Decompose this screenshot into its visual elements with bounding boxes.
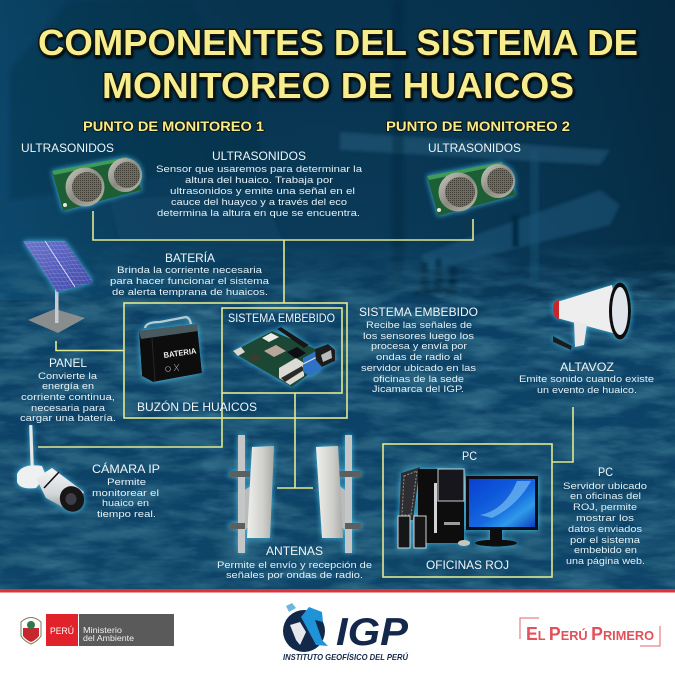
label: ultrasonidos 2: ULTRASONIDOS bbox=[428, 141, 521, 155]
icon: ultrasonic sensor 1 bbox=[52, 157, 142, 211]
text: PC description: ROJ, permite bbox=[573, 502, 637, 512]
text: antenas description bbox=[217, 544, 372, 580]
text: sistema embebido description: procesa y envía por bbox=[371, 341, 467, 351]
text: ultrasonidos description: cauce del huayco y a través del eco bbox=[171, 197, 347, 207]
text: cámara IP description: huaico en bbox=[102, 498, 149, 508]
icon: battery bbox=[139, 317, 202, 382]
connector lines bbox=[38, 211, 573, 488]
text: ultrasonidos description: ultrasonidos y emite una señal en el bbox=[170, 186, 355, 196]
text: batería description: de alerta temprana de huaicos. bbox=[112, 287, 268, 297]
icon: antenna right bbox=[316, 435, 361, 553]
text: ultrasonidos description: ULTRASONIDOS bbox=[212, 149, 306, 163]
text: cámara IP description: CÁMARA IP bbox=[92, 461, 160, 476]
icon: ultrasonic sensor 2 bbox=[427, 162, 516, 216]
label: ultrasonidos 1: ULTRASONIDOS bbox=[21, 141, 114, 155]
text: PC description: PC bbox=[598, 465, 613, 479]
logo: El Perú Primero bbox=[520, 618, 660, 646]
label: PC box: PC bbox=[462, 449, 477, 463]
text: PC description: datos enviados bbox=[568, 524, 642, 534]
text: antenas description: Permite el envío y recepción de bbox=[217, 560, 372, 570]
logo: IGP bbox=[283, 603, 409, 662]
logo: Ministerio del Ambiente: del Ambiente bbox=[83, 634, 135, 643]
text: sistema embebido description bbox=[359, 305, 478, 394]
text: sistema embebido description: Recibe las señales de bbox=[366, 320, 472, 330]
box: oficinas ROJ bbox=[383, 444, 552, 577]
text: ultrasonidos description: Sensor que usaremos para determinar la bbox=[156, 164, 363, 174]
box: sistema embebido bbox=[222, 308, 342, 393]
text: batería description: para hacer funcionar el sistema bbox=[110, 276, 270, 286]
icon: IP camera bbox=[17, 425, 88, 516]
icon: solar panel bbox=[23, 241, 93, 333]
text: ultrasonidos description: determina la altura en que se encuentra. bbox=[157, 208, 360, 218]
text: PC description: embebido en bbox=[574, 545, 637, 555]
text: PC description: en oficinas del bbox=[570, 491, 641, 501]
text: PC description: mostrar los bbox=[576, 513, 634, 523]
logo: El Perú Primero: EL PERÚ PRIMERO bbox=[526, 624, 654, 644]
text: antenas description: señales por ondas de radio. bbox=[226, 570, 363, 580]
text: PC description: por el sistema bbox=[570, 535, 641, 545]
text: cámara IP description: monitorear el bbox=[92, 488, 159, 498]
text: panel description bbox=[20, 356, 116, 423]
label: oficinas ROJ: OFICINAS ROJ bbox=[426, 558, 509, 572]
heading: punto de monitoreo 2: PUNTO DE MONITOREO 2 bbox=[386, 119, 570, 134]
logo: Ministerio del Ambiente: Ministerio bbox=[83, 626, 123, 635]
logo: IGP: IGP bbox=[336, 611, 409, 654]
text: sistema embebido description: oficinas de la sede bbox=[373, 374, 464, 384]
text: antenas description: ANTENAS bbox=[266, 544, 323, 558]
text: panel description: necesaria para bbox=[31, 403, 106, 413]
icon: desktop computer bbox=[398, 467, 538, 548]
text: ultrasonidos description: altura del huaico. Trabaja por bbox=[185, 175, 333, 185]
text: PC description: una página web. bbox=[566, 556, 645, 566]
title: MONITOREO DE HUAICOS bbox=[102, 65, 574, 106]
text: sistema embebido description: ondas de radio al bbox=[376, 352, 462, 362]
text: sistema embebido description: SISTEMA EMBEBIDO bbox=[359, 305, 478, 319]
heading: punto de monitoreo 1: PUNTO DE MONITOREO 1 bbox=[83, 119, 265, 134]
red divider bbox=[0, 589, 675, 592]
text: sistema embebido description: servidor ubicado en las bbox=[361, 363, 476, 373]
icon: raspberry pi board bbox=[232, 327, 335, 387]
text: batería description: Brinda la corriente necesaria bbox=[117, 265, 263, 275]
icon: antenna left bbox=[229, 435, 274, 553]
text: panel description: corriente continua, bbox=[21, 392, 115, 402]
text: PC description: Servidor ubicado bbox=[563, 481, 647, 491]
text: PC description bbox=[563, 465, 647, 566]
icon: battery: BATERIA bbox=[163, 346, 197, 360]
title bbox=[38, 22, 638, 106]
text: panel description: Convierte la bbox=[38, 371, 98, 381]
text: sistema embebido description: Jicamarca del IGP. bbox=[372, 384, 464, 394]
text: altavoz description: un evento de huaico. bbox=[537, 385, 637, 395]
logo: Ministerio del Ambiente bbox=[46, 614, 174, 646]
label: sistema embebido box: SISTEMA EMBEBIDO bbox=[228, 313, 335, 325]
icon: megaphone bbox=[553, 282, 631, 350]
text: cámara IP description: Permite bbox=[107, 477, 146, 487]
text: panel description: cargar una batería. bbox=[20, 413, 116, 423]
text: cámara IP description bbox=[92, 461, 160, 519]
box: buzón de huaicos bbox=[124, 303, 347, 418]
text: panel description: PANEL bbox=[49, 356, 87, 370]
logo: Ministerio del Ambiente: PERÚ bbox=[50, 626, 74, 637]
label: buzón de huaicos: BUZÓN DE HUAICOS bbox=[137, 399, 257, 414]
text: sistema embebido description: los sensores luego los bbox=[363, 331, 474, 341]
logo: IGP: INSTITUTO GEOFÍSICO DEL PERÚ bbox=[283, 651, 409, 662]
logo: Peru coat of arms bbox=[21, 618, 41, 644]
text: altavoz description: ALTAVOZ bbox=[560, 360, 614, 374]
title: COMPONENTES DEL SISTEMA DE bbox=[38, 22, 638, 63]
text: batería description: BATERÍA bbox=[165, 250, 215, 265]
text: ultrasonidos description bbox=[156, 149, 363, 218]
footer band bbox=[0, 592, 675, 675]
text: altavoz description bbox=[519, 360, 654, 395]
text: altavoz description: Emite sonido cuando existe bbox=[519, 374, 654, 384]
text: cámara IP description: tiempo real. bbox=[97, 509, 156, 519]
text: panel description: energía en bbox=[42, 381, 94, 391]
text: batería description bbox=[110, 250, 270, 297]
